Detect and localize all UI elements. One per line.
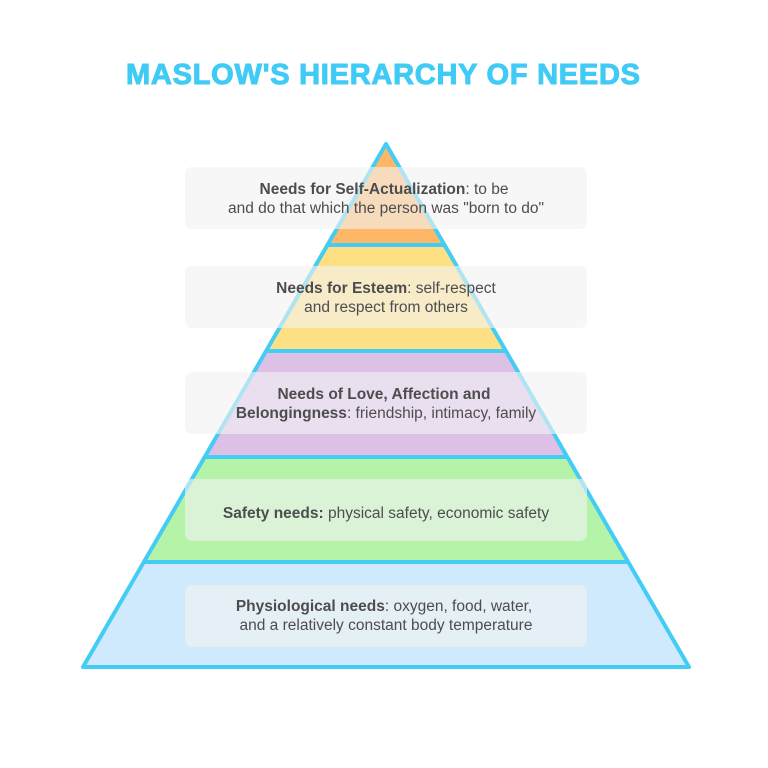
card: physiological <box>185 585 587 647</box>
card text: esteem: and respect from others <box>304 299 468 316</box>
card text: love and belonging: Belongingness: friendship, intimacy, family <box>236 405 536 422</box>
card text: physiological: and a relatively constant body temperature <box>240 617 532 634</box>
tier: love and belonging <box>203 351 569 457</box>
pyramid outline <box>83 144 689 667</box>
card text: safety: Safety needs: physical safety, economic safety <box>223 505 549 522</box>
tier: safety <box>143 457 629 562</box>
title: MASLOW'S HIERARCHY OF NEEDS <box>126 59 640 91</box>
card text: self-actualization: and do that which the person was "born to do" <box>228 200 544 217</box>
card text: physiological: Physiological needs: oxygen, food, water, <box>236 598 532 615</box>
tier: physiological <box>83 562 689 667</box>
card text: love and belonging: Needs of Love, Affection and <box>277 386 491 403</box>
tier: esteem <box>264 245 508 351</box>
card: safety <box>185 479 587 541</box>
card: love and belonging <box>185 372 587 434</box>
tier: self-actualization <box>325 143 447 245</box>
card: esteem <box>185 266 587 328</box>
card text: esteem: Needs for Esteem: self-respect <box>276 280 496 297</box>
card text: self-actualization: Needs for Self-Actualization: to be <box>260 181 508 198</box>
card: self-actualization <box>185 167 587 229</box>
pyramid <box>83 143 689 667</box>
